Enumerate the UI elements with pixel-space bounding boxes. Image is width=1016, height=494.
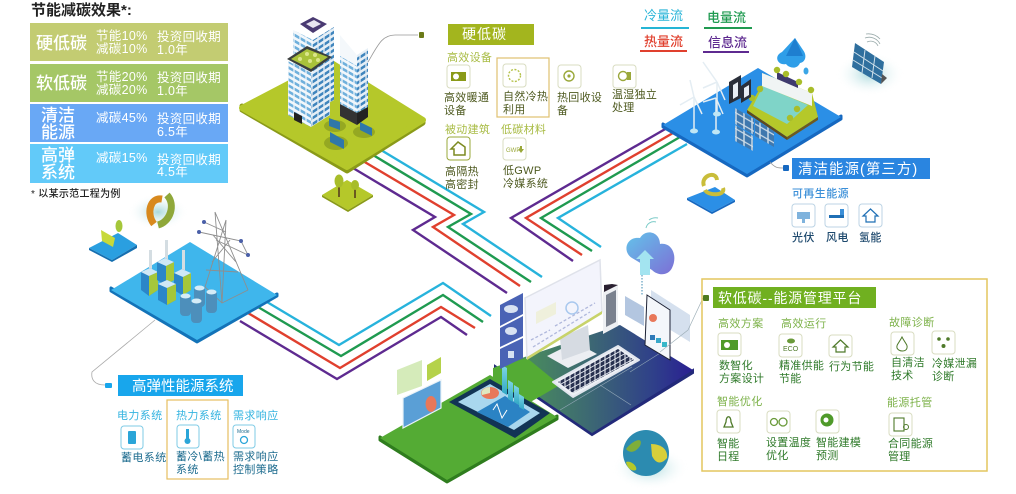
panel: soft low carbon energy management platform: 节能: [779, 371, 802, 385]
icon: low GWP: [503, 138, 526, 160]
panel: clean energy: 氢能: [859, 230, 882, 244]
panel: soft low carbon energy management platform: 冷媒泄漏: [932, 357, 977, 370]
icon: digital design: [718, 333, 741, 356]
sub headings: 电力系统: [117, 409, 163, 422]
panel: resilient energy system: [92, 320, 279, 479]
panel: energy and carbon savings table: [30, 1, 228, 200]
panel: soft low carbon energy management platform: 管理: [888, 449, 911, 463]
cloud upload: [626, 218, 674, 295]
panel: soft low carbon energy management platform: 设置温度: [766, 435, 811, 449]
front green roof building: [288, 61, 311, 127]
storage tanks: [180, 286, 217, 323]
heading banner: [448, 24, 534, 45]
panel: hard low carbon: 低碳材料: [501, 122, 546, 136]
platform base: [111, 288, 277, 342]
panel: soft low carbon energy management platform: 能源托管: [887, 395, 933, 409]
highlight frame: [167, 400, 228, 479]
table heading: 节能减碳效果*:: [31, 1, 132, 19]
tablet: [449, 379, 550, 438]
sub heading: 可再生能源: [792, 186, 849, 200]
row: hard low carbon: 投资回收期: [157, 29, 221, 44]
icon: globe: [612, 430, 688, 490]
panel: hard low carbon: 设备: [444, 103, 467, 117]
connector with plug: [92, 320, 155, 385]
platform base: [663, 116, 841, 176]
panel: soft low carbon energy management platform: 软低碳--能源管理平台: [718, 290, 862, 306]
legend: flow types: 冷量流: [644, 8, 683, 23]
icon: refrigerant leak: [932, 331, 955, 354]
icon: thermometer: [177, 425, 199, 448]
panel: hard low carbon: 热回收设: [557, 90, 602, 104]
connector plug: [770, 162, 783, 168]
row: hard low carbon: 硬低碳: [36, 34, 87, 53]
panel: soft low carbon energy management platform: 智能优化: [717, 394, 763, 408]
panel: resilient energy system: 需求响应: [233, 449, 279, 463]
row: clean energy: 清洁: [41, 106, 75, 125]
panel: soft low carbon energy management platform: [702, 279, 987, 471]
monitor: [525, 260, 602, 358]
panel: soft low carbon energy management platform: 行为节能: [829, 359, 874, 373]
monitor frames: [729, 75, 741, 104]
icon: insulation house: [447, 137, 470, 160]
illustration: small blue recycle tile: [687, 175, 735, 214]
green platform: [380, 416, 557, 482]
water spillway: [753, 86, 808, 124]
floating cards: [625, 296, 644, 326]
icon: temperature humidity control: [613, 65, 636, 88]
panel: soft low carbon energy management platform: 智能建模: [816, 435, 861, 449]
plug: [703, 295, 709, 301]
teal bars: [502, 365, 524, 410]
panel: soft low carbon energy management platform: 方案设计: [719, 371, 764, 385]
legend: flow types: 信息流: [708, 35, 747, 50]
icon: natural cooling: [503, 64, 526, 87]
panel: clean energy: 风电: [826, 231, 849, 244]
row: hard low carbon: [30, 23, 228, 61]
panel: resilient energy system: 系统: [176, 463, 199, 476]
panel: resilient energy system: 控制策略: [233, 462, 279, 476]
dark platform: [495, 366, 693, 435]
illustration: resilient energy platform: [89, 194, 277, 342]
icon: solar panel with wifi: [836, 34, 904, 96]
item labels: 数智化: [719, 358, 753, 372]
flow lines: clean energy to platform: [511, 128, 687, 261]
floating green cards: [397, 360, 422, 395]
keyboard: [553, 346, 639, 397]
heading banner: [713, 287, 876, 308]
panel: clean energy: [770, 158, 930, 244]
row: hard low carbon: 1.0年: [157, 43, 188, 57]
chimneys: [149, 250, 152, 270]
panel: resilient energy system: 需求响应: [233, 408, 279, 422]
row: clean energy: [30, 104, 228, 142]
row: clean energy: 能源: [41, 123, 75, 142]
icon: temperature setting: [767, 411, 790, 433]
side panels: [500, 293, 523, 326]
icon: self cleaning: [891, 332, 914, 355]
panel: soft low carbon energy management platform: 高效运行: [781, 316, 827, 330]
row: resilient system: 4.5年: [157, 165, 188, 179]
outer frame: [702, 279, 987, 471]
panel: soft low carbon energy management platform: 自清洁: [891, 356, 925, 369]
icon: HVAC: [447, 65, 470, 88]
panel: soft low carbon energy management platform: 日程: [717, 450, 740, 463]
panel: soft low carbon energy management platform: 预测: [816, 449, 839, 462]
panel: hard low carbon: 温湿独立: [612, 87, 657, 101]
back tower: [293, 30, 313, 112]
panel: hard low carbon: 高密封: [445, 177, 479, 191]
icon: low GWP: GWP: [506, 148, 520, 154]
panel: hard low carbon: 利用: [503, 103, 526, 116]
panel: hard low carbon: 硬低碳: [462, 26, 507, 42]
panel: hard low carbon: 被动建筑: [445, 122, 490, 136]
panel: soft low carbon energy management platform: 优化: [766, 448, 789, 462]
legend: flow types: [640, 8, 752, 53]
row: clean energy: 减碳45%: [96, 111, 148, 125]
illustration: central digital platform: [380, 218, 703, 482]
icon: demand mode: Mode: [237, 429, 250, 435]
floating screen: [403, 380, 441, 428]
icon: smart modeling: [816, 410, 839, 433]
row: soft low carbon: 节能20%: [96, 70, 148, 84]
leader line: [660, 298, 703, 352]
panel: soft low carbon energy management platform: 精准供能: [779, 358, 824, 372]
highlight frame: [497, 58, 549, 117]
item labels: 光伏: [792, 230, 815, 244]
flow lines: resilient system to platform: [240, 283, 491, 379]
panel: hard low carbon: 冷媒系统: [503, 177, 548, 190]
legend: flow types: 电量流: [707, 10, 746, 25]
hydro dam hill: [747, 73, 818, 137]
panel: soft low carbon energy management platform: 合同能源: [888, 436, 933, 450]
monitor stand: [547, 342, 597, 368]
small plug tile: [89, 220, 137, 262]
icon: contract management: [889, 413, 912, 436]
heading banner: [118, 375, 243, 396]
row: resilient system: 系统: [41, 163, 75, 182]
panel: hard low carbon: 自然冷热: [503, 89, 548, 103]
item labels: 高效暖通: [444, 90, 489, 104]
transmission tower: [199, 212, 248, 303]
icon: rain cloud: [777, 38, 808, 74]
item labels: 蓄电系统: [121, 451, 167, 464]
connector plug: [368, 35, 418, 62]
row: resilient system: 高弹: [41, 146, 75, 165]
panel: clean energy: 清洁能源(第三方): [798, 160, 918, 178]
row: soft low carbon: 投资回收期: [157, 70, 221, 85]
server: [603, 285, 618, 334]
legend: flow types: 热量流: [644, 34, 683, 49]
platform: [242, 106, 423, 171]
illustration: clean energy platform: [663, 62, 841, 176]
icon: heat recovery: [558, 65, 581, 88]
icon: eco supply: [779, 334, 802, 357]
recycle icon: [128, 194, 188, 230]
pie chart: [481, 387, 499, 399]
row: clean energy: 投资回收期: [157, 111, 221, 126]
row: hard low carbon: 节能10%: [96, 29, 148, 43]
panel: hard low carbon: 处理: [612, 101, 635, 114]
panel: resilient energy system: 高弹性能源系统: [132, 378, 234, 395]
icon: eco supply: ECO: [783, 346, 799, 353]
illustration: small tree tile: [322, 174, 373, 212]
illustration: hard low carbon buildings: [242, 17, 424, 171]
panel: resilient energy system: 蓄冷\蓄热: [176, 450, 225, 463]
panel: resilient energy system: 热力系统: [176, 409, 222, 422]
heading banner: [792, 158, 930, 179]
solar array: [735, 108, 754, 135]
panel: soft low carbon energy management platform: 智能: [717, 436, 740, 450]
row: soft low carbon: 软低碳: [36, 74, 87, 93]
panel: hard low carbon: [444, 24, 657, 191]
row: resilient system: 减碳15%: [96, 151, 148, 165]
panel: hard low carbon: 低GWP: [503, 164, 541, 177]
row: soft low carbon: [30, 64, 228, 102]
row: resilient system: 投资回收期: [157, 152, 221, 167]
row: soft low carbon: 1.0年: [157, 84, 188, 98]
solar panels on platform: [324, 120, 346, 132]
row: hard low carbon: 减碳10%: [96, 42, 148, 56]
icon: hydrogen: [859, 204, 882, 227]
energy storage units: [141, 258, 191, 305]
sub headings: 高效设备: [447, 50, 492, 64]
dam wall: [762, 73, 812, 106]
panel: hard low carbon: 备: [557, 103, 568, 117]
icon: battery: [121, 426, 143, 449]
flow lines: hard low carbon to platform: [353, 150, 542, 293]
panel: soft low carbon energy management platform: 诊断: [932, 369, 955, 383]
row: resilient system: [30, 144, 228, 183]
icon: smart schedule bell: [717, 410, 740, 433]
icon: wind power: [825, 204, 848, 227]
icon: photovoltaic: [792, 204, 815, 227]
wind turbines: [680, 62, 725, 132]
panel: soft low carbon energy management platform: 技术: [891, 369, 914, 382]
tall tower: [340, 35, 357, 113]
row: soft low carbon: 减碳20%: [96, 83, 148, 97]
sub headings: 高效方案: [718, 316, 764, 330]
icon: demand mode: [233, 425, 255, 448]
icon: behavior saving: [829, 335, 852, 357]
panel: hard low carbon: 高隔热: [445, 164, 479, 178]
row: clean energy: 6.5年: [157, 125, 188, 139]
phone: [645, 295, 670, 360]
footnote: * 以某示范工程为例: [31, 187, 121, 200]
panel: soft low carbon energy management platform: 故障诊断: [889, 315, 935, 329]
